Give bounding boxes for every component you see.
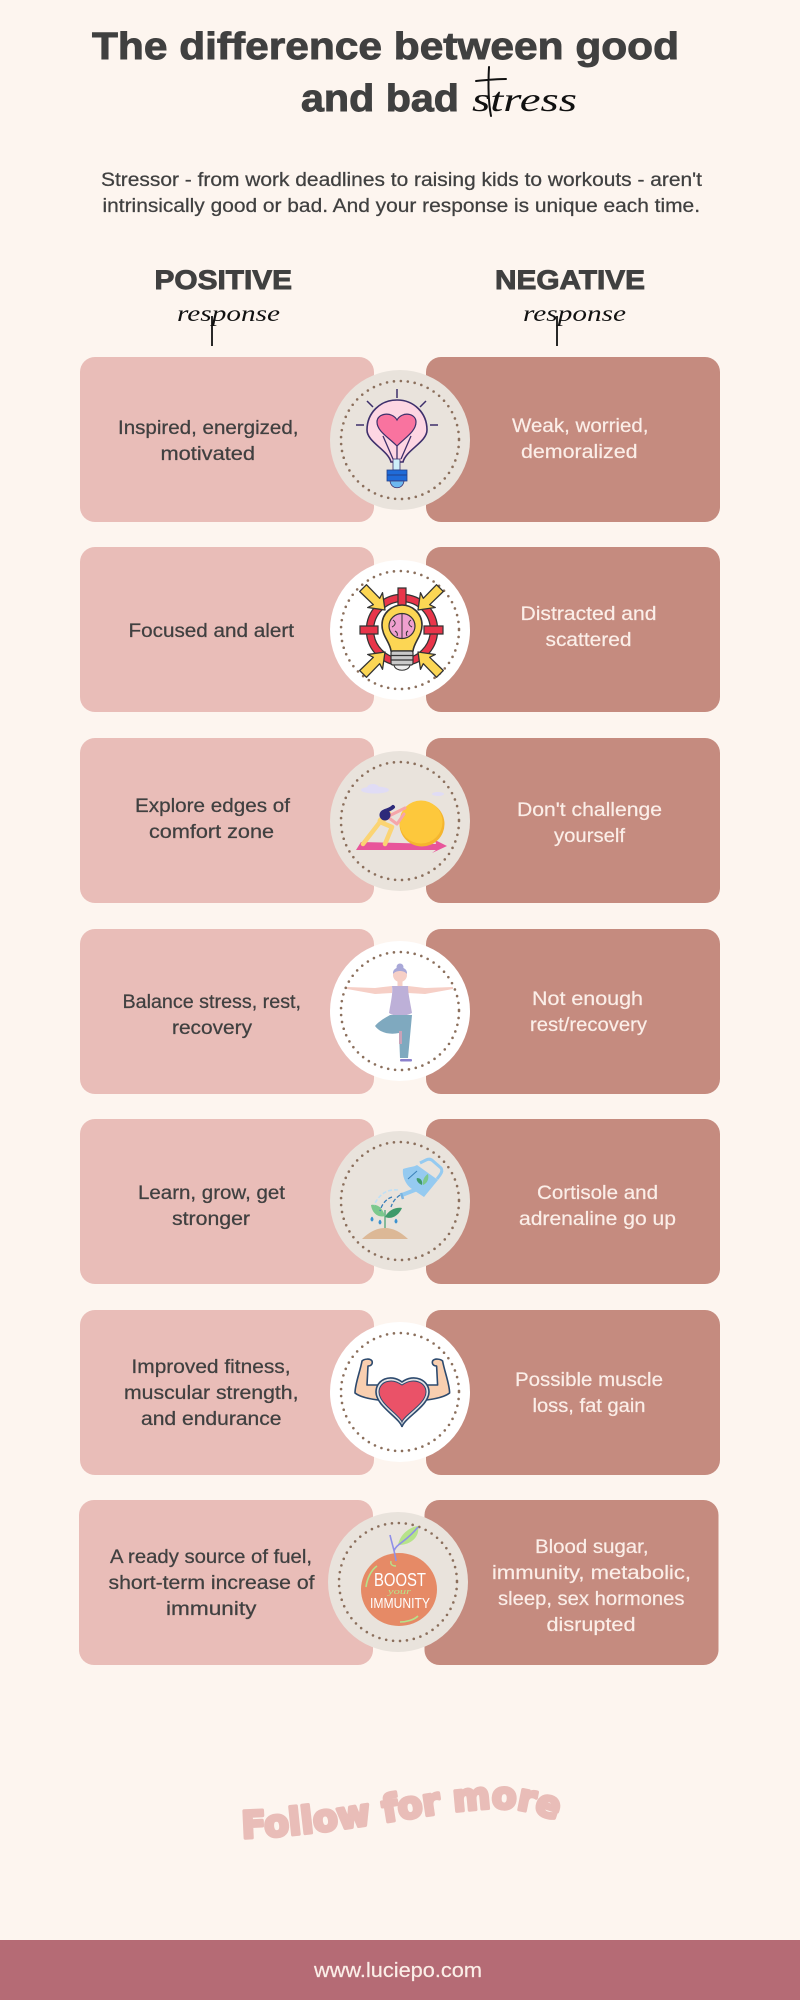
icon: boost immunity orange: BOOST (374, 1570, 426, 1590)
icon: woman pushing ball (330, 751, 470, 891)
positive card 5: stronger (172, 1209, 251, 1230)
positive card 6 (80, 1310, 374, 1475)
negative card 2 (426, 547, 720, 712)
positive card 7: A ready source of fuel, (110, 1547, 312, 1568)
negative card 2: scattered (546, 630, 632, 651)
intro text: intrinsically good or bad. And your response is unique each time. (102, 196, 700, 217)
negative card 2: Distracted and (520, 604, 656, 625)
positive card 1 (80, 357, 374, 522)
positive card 3 (80, 738, 374, 903)
negative card 7: disrupted (546, 1615, 636, 1636)
intro text: Stressor - from work deadlines to raising kids to workouts - aren't (101, 170, 703, 191)
icon: flexing heart (330, 1322, 470, 1462)
title: stress (472, 82, 577, 119)
negative card 4 (426, 929, 720, 1094)
icon: yoga tree pose (330, 941, 470, 1081)
positive card 4 (80, 929, 374, 1094)
title: and bad (301, 78, 459, 120)
negative card 4: rest/recovery (530, 1015, 648, 1036)
negative card 1: demoralized (521, 442, 638, 463)
title: The difference between good (92, 26, 679, 68)
negative card 3: yourself (554, 826, 626, 847)
negative card 7: immunity, metabolic, (492, 1563, 691, 1584)
heading: negative response: NEGATIVE (495, 265, 645, 295)
panel: row 3 (80, 738, 720, 903)
panel: row 7 (79, 1500, 718, 1665)
positive card 7: immunity (166, 1599, 257, 1620)
title (92, 26, 679, 120)
negative card 4: Not enough (532, 989, 643, 1010)
panel: row 4 (80, 929, 720, 1094)
positive card 2 (80, 547, 374, 712)
icon: boost immunity orange (328, 1512, 468, 1652)
positive card 6: Improved fitness, (132, 1357, 290, 1378)
heading: negative response (495, 265, 645, 346)
icon: boost immunity orange: IMMUNITY (370, 1595, 430, 1612)
icon: boost immunity orange: your (386, 1587, 412, 1596)
negative card 1: Weak, worried, (512, 416, 648, 437)
heading: negative response: response (523, 301, 626, 326)
negative card 5: adrenaline go up (519, 1209, 676, 1230)
positive card 5: Learn, grow, get (138, 1183, 286, 1204)
positive card 3: comfort zone (149, 822, 274, 843)
positive card 1: Inspired, energized, (118, 418, 298, 439)
negative card 6: Possible muscle (515, 1370, 663, 1391)
panel: row 5 (80, 1119, 720, 1284)
negative card 5 (426, 1119, 720, 1284)
positive card 5 (80, 1119, 374, 1284)
panel: row 1 (80, 357, 720, 522)
intro text (101, 170, 703, 217)
follow for more: Follow for more (242, 1786, 560, 1840)
negative card 7: sleep, sex hormones (498, 1589, 684, 1610)
heading: positive response (154, 265, 292, 346)
negative card 5: Cortisole and (537, 1183, 658, 1204)
icon: watering can and seedling (330, 1131, 470, 1271)
negative card 3: Don't challenge (517, 800, 662, 821)
icon: brain bulb target (330, 560, 470, 700)
negative card 7 (424, 1500, 718, 1665)
footer bar (0, 1940, 800, 2000)
negative card 3 (426, 738, 720, 903)
positive card 4: Balance stress, rest, (122, 992, 301, 1013)
heading: positive response: POSITIVE (154, 265, 292, 295)
positive card 7 (79, 1500, 373, 1665)
panel: row 2 (80, 547, 720, 712)
footer bar: www.luciepo.com (313, 1960, 482, 1982)
positive card 3: Explore edges of (135, 796, 291, 817)
positive card 1: motivated (160, 444, 255, 465)
positive card 6: muscular strength, (124, 1383, 298, 1404)
positive card 4: recovery (172, 1018, 253, 1039)
negative card 6 (426, 1310, 720, 1475)
panel: row 6 (80, 1310, 720, 1475)
heading: positive response: response (177, 301, 280, 326)
negative card 7: Blood sugar, (535, 1537, 648, 1558)
icon: heart light bulb (330, 370, 470, 510)
positive card 2: Focused and alert (128, 621, 295, 642)
positive card 7: short-term increase of (108, 1573, 315, 1594)
positive card 6: and endurance (141, 1409, 282, 1430)
negative card 6: loss, fat gain (532, 1396, 646, 1417)
negative card 1 (426, 357, 720, 522)
